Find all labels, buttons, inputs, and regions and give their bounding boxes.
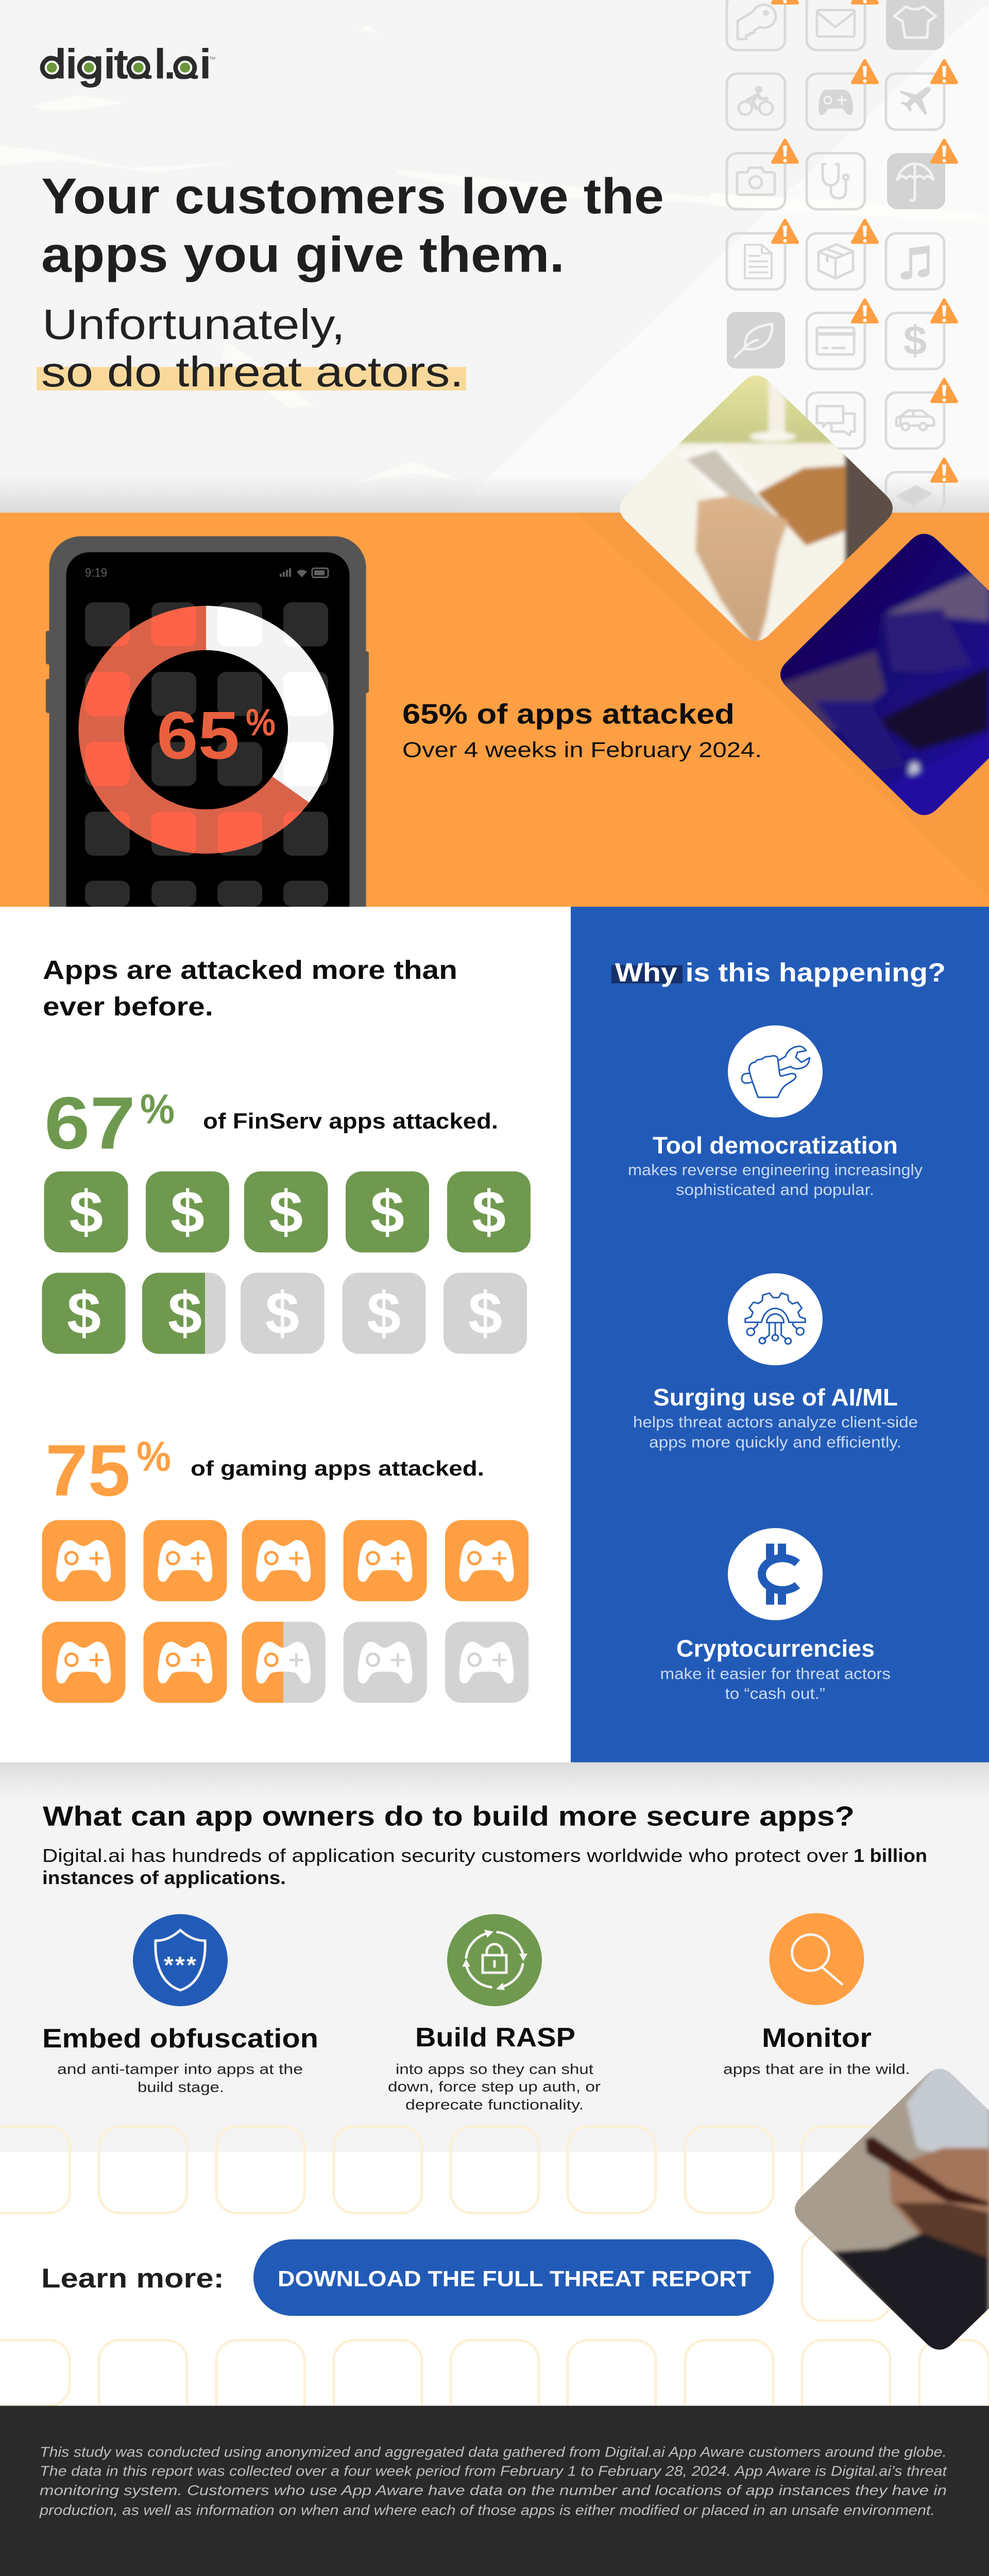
icon: airplane	[886, 74, 944, 130]
reason: cryptocurrencies	[660, 1635, 891, 1702]
donut chart: 65 percent	[78, 606, 334, 854]
icon: gear and circuit	[728, 1273, 823, 1365]
pictogram: game controller tiles	[42, 1520, 528, 1703]
status bar: 9:19	[85, 566, 107, 580]
reason: tool democratization: makes reverse engineering increasingly	[628, 1161, 923, 1179]
phone mockup with donut	[46, 536, 369, 907]
statistic: gaming 75 percent: 75	[45, 1430, 130, 1511]
heading: Apps are attacked more than	[43, 956, 457, 985]
call to action	[41, 2239, 774, 2316]
pictogram: dollar tiles: $	[168, 1280, 202, 1347]
call to action: Learn more:	[41, 2264, 224, 2294]
footer: methodology note	[0, 2406, 989, 2576]
intro text: instances of applications.	[42, 1867, 286, 1888]
button	[253, 2239, 774, 2316]
reason: surging AI/ML: helps threat actors analyze client-side	[633, 1414, 918, 1431]
statistic: FinServ 67 percent: of FinServ apps attacked.	[203, 1109, 498, 1133]
pictogram: dollar tiles: $	[472, 1179, 506, 1245]
icon: shirt tile	[886, 0, 944, 50]
panel: attacks by sector	[0, 907, 571, 1763]
statistic: gaming 75 percent: %	[137, 1433, 171, 1480]
pictogram: dollar tiles: $	[370, 1179, 404, 1245]
photo: man using phone	[795, 2069, 989, 2350]
statistic: FinServ 67 percent	[44, 1081, 498, 1164]
pictogram: dollar tiles	[42, 1172, 531, 1354]
donut label: 65	[157, 698, 240, 773]
pictogram: dollar tiles: $	[69, 1179, 103, 1245]
icon: package	[807, 233, 865, 290]
title	[41, 168, 664, 282]
icon: dollar	[886, 313, 944, 369]
reason: tool democratization: sophisticated and popular.	[676, 1181, 874, 1199]
footer: methodology note: This study was conducted using anonymized and aggregated data gathered from Digital.ai App Aware customers around the globe.	[40, 2444, 947, 2461]
warning badges	[773, 0, 957, 481]
icon: chat bubbles	[807, 393, 865, 449]
icon: credit card	[807, 313, 865, 369]
heading	[43, 956, 457, 1021]
icon: stethoscope	[807, 153, 865, 209]
action: build RASP: deprecate functionality.	[405, 2097, 584, 2113]
action: build RASP: Build RASP	[415, 2023, 575, 2053]
logo: digital.ai: digital.ai	[40, 41, 211, 88]
statistic: 65 percent of apps attacked	[402, 698, 762, 761]
statistic: 65 percent of apps attacked: Over 4 weeks in February 2024.	[402, 738, 762, 761]
action: build RASP	[388, 2023, 601, 2113]
icon: mail	[807, 0, 865, 50]
reason: tool democratization: Tool democratization	[653, 1132, 898, 1159]
footer: methodology note: production, as well as information on when and where each of those apps is either modified or placed in an unsafe environment.	[39, 2502, 935, 2518]
photo: hands holding phone	[620, 376, 893, 641]
pictogram: dollar tiles: $	[269, 1179, 303, 1245]
action: monitor	[723, 2023, 910, 2077]
intro text: Digital.ai has hundreds of application security customers worldwide who protect over	[42, 1845, 848, 1866]
reason: cryptocurrencies: Cryptocurrencies	[676, 1635, 875, 1663]
icon: game controller	[807, 74, 865, 130]
subtitle: so do threat actors.	[41, 348, 464, 396]
button: DOWNLOAD THE FULL THREAT REPORT	[278, 2267, 752, 2291]
action: monitor: Monitor	[762, 2023, 872, 2053]
icon grid: apps under threat	[727, 0, 945, 513]
action: embed obfuscation	[42, 2024, 318, 2095]
reason: cryptocurrencies: make it easier for threat actors	[660, 1665, 891, 1683]
subtitle: Unfortunately,	[42, 300, 345, 348]
reason: surging AI/ML	[633, 1384, 918, 1451]
photo: hacker at keyboard	[780, 534, 989, 815]
icon: car	[886, 393, 944, 449]
action: monitor: apps that are in the wild.	[723, 2061, 910, 2077]
reason: surging AI/ML: Surging use of AI/ML	[653, 1384, 898, 1411]
reason: surging AI/ML: apps more quickly and efficiently.	[649, 1434, 901, 1451]
icon: crypto coin	[728, 1528, 823, 1620]
heading: ever before.	[43, 992, 213, 1021]
action: build RASP: down, force step up auth, or	[388, 2079, 601, 2095]
icon: hand with wrench	[728, 1025, 823, 1117]
pictogram: dollar tiles: $	[265, 1280, 299, 1347]
subtitle	[37, 300, 466, 396]
icon: key	[727, 0, 785, 50]
pictogram: dollar tiles: $	[468, 1280, 502, 1347]
heading: What can app owners do to build more secure apps?	[43, 1801, 855, 1832]
statistic: 65 percent of apps attacked: 65% of apps attacked	[402, 698, 735, 730]
icon: leaf tile	[727, 312, 785, 368]
icon: dollar: $	[903, 318, 927, 364]
heading: Why is this happening?	[615, 958, 946, 987]
icon: lock with arrows	[447, 1914, 542, 2006]
pictogram: dollar tiles: $	[170, 1179, 204, 1245]
action: embed obfuscation: build stage.	[138, 2079, 224, 2095]
icon: shield	[133, 1914, 228, 2006]
icon: bicycle	[727, 74, 785, 130]
action: embed obfuscation: Embed obfuscation	[42, 2024, 318, 2054]
statistic: FinServ 67 percent: 67	[44, 1081, 135, 1164]
panel: hero background	[0, 0, 989, 516]
icon: magnifier	[770, 1913, 864, 2005]
action: build RASP: into apps so they can shut	[396, 2061, 593, 2077]
pictogram: dollar tiles: $	[367, 1280, 401, 1347]
statistic: gaming 75 percent	[45, 1430, 484, 1511]
icon: shield: ***	[164, 1952, 197, 1979]
icon: document	[727, 233, 785, 290]
icon: umbrella tile	[887, 153, 945, 209]
logo: digital.ai: TM	[210, 56, 215, 61]
donut label: %	[246, 701, 276, 743]
pictogram: dollar tiles: $	[67, 1280, 101, 1347]
panel: what app owners can do	[0, 1762, 989, 2406]
statistic: gaming 75 percent: of gaming apps attacked.	[191, 1456, 484, 1480]
panel: why is this happening	[571, 907, 989, 1763]
title: apps you give them.	[41, 227, 565, 282]
statistic: FinServ 67 percent: %	[140, 1087, 175, 1132]
footer: methodology note: The data in this report was collected over a four week period from February 1 to February 28, 2024. App Aware is Digital.ai’s threat	[40, 2463, 947, 2480]
intro text	[42, 1845, 927, 1888]
action: embed obfuscation: and anti-tamper into apps at the	[57, 2061, 303, 2078]
footer: methodology note: monitoring system. Customers who use App Aware have data on the number and locations of app instances they have in	[40, 2482, 947, 2499]
title: Your customers love the	[41, 168, 664, 224]
icon: book	[886, 472, 944, 513]
icon: music note	[886, 233, 944, 290]
donut label	[157, 698, 276, 773]
panel: orange statistic band	[0, 513, 989, 907]
intro text: 1 billion	[854, 1845, 927, 1866]
reason: cryptocurrencies: to “cash out.”	[725, 1685, 825, 1702]
status bar	[85, 566, 328, 580]
icon: camera	[727, 153, 785, 209]
reason: tool democratization	[628, 1132, 923, 1199]
